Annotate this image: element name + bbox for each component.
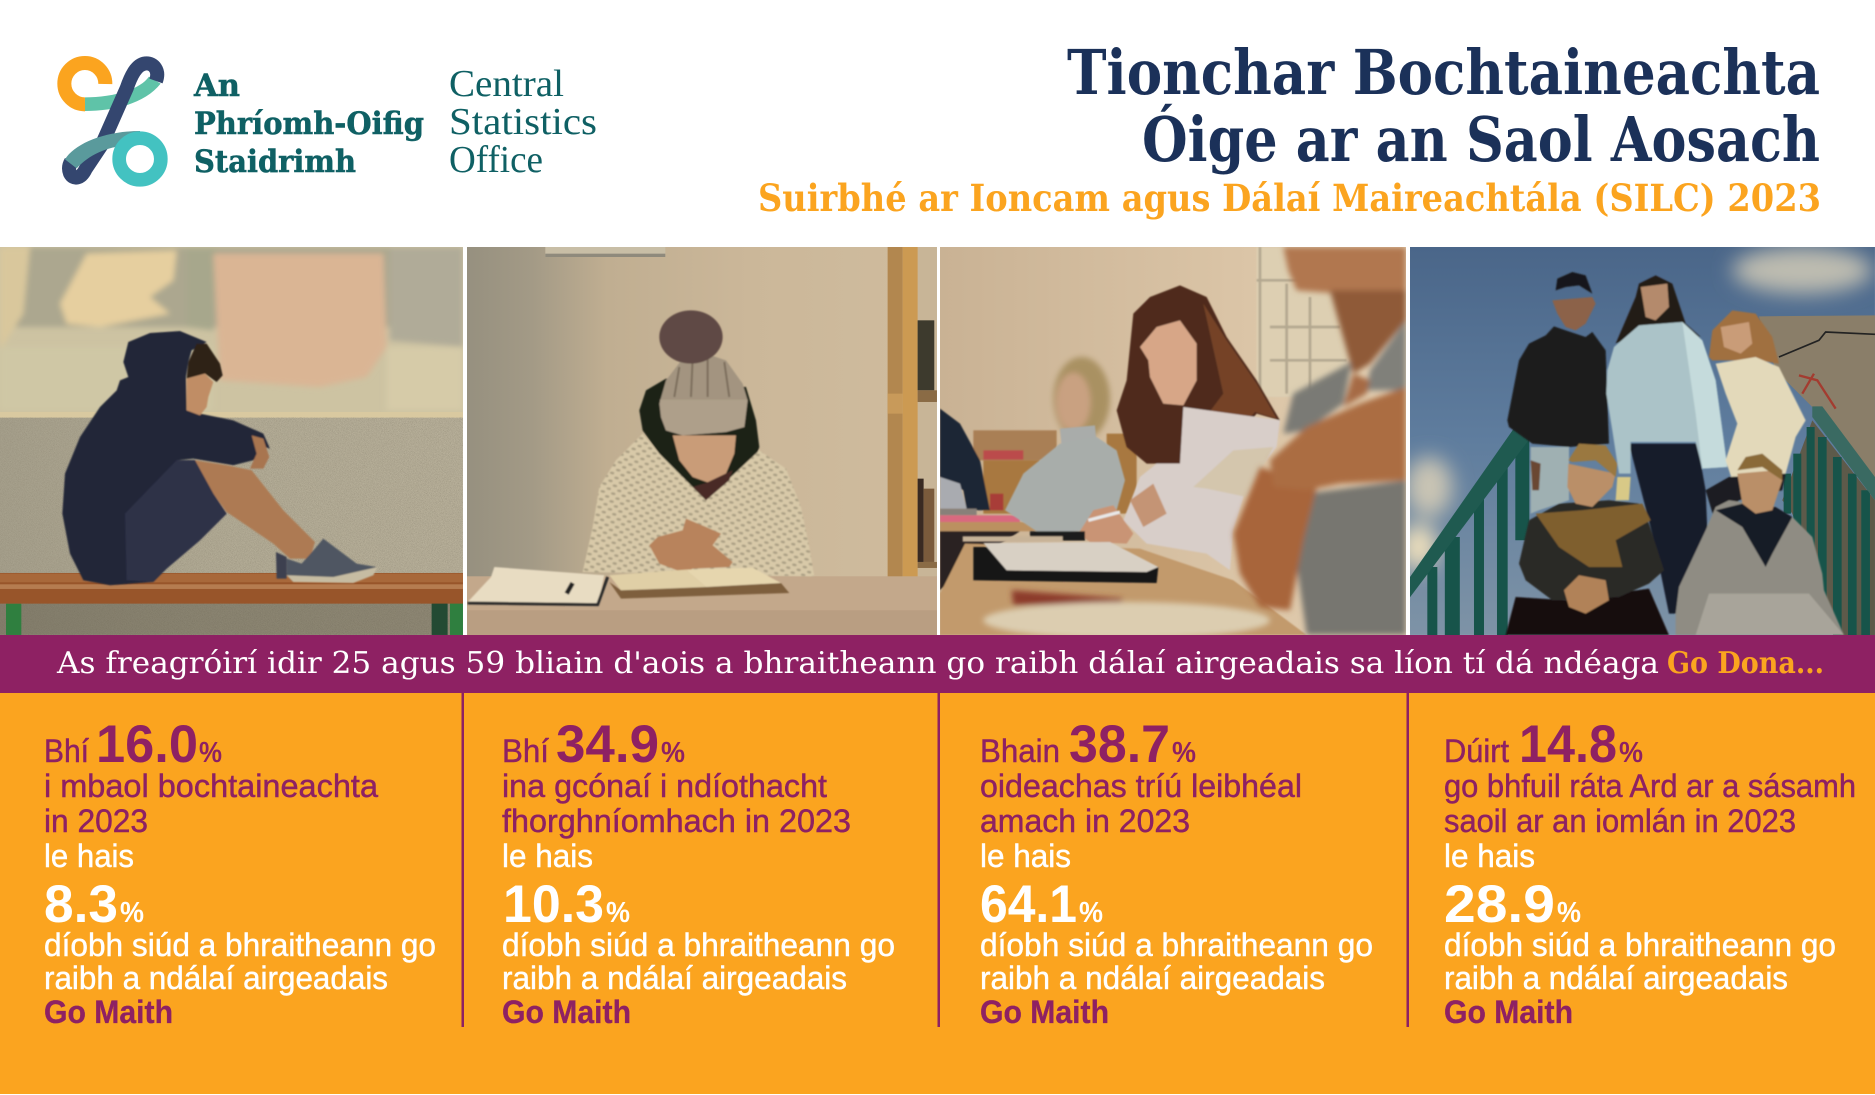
panel: life satisfaction: Dúirt: [1444, 733, 1509, 769]
panel: material deprivation: %: [606, 897, 630, 929]
panel: material deprivation: díobh siúd a bhraitheann go: [502, 927, 895, 963]
photo: boy sitting on a bench: [0, 247, 463, 635]
panel: material deprivation: Bhí: [502, 733, 549, 769]
logo text: Irish name: Staidrimh: [194, 144, 356, 180]
banner: survey respondents: As freagróirí idir 25 agus 59 bliain d'aois a bhraitheann go raibh dálaí airgeadais sa líon tí dá ndéaga: [56, 646, 1659, 681]
panel: poverty risk: Go Maith: [44, 994, 173, 1030]
icon: CSO knot mark: [64, 63, 161, 180]
panel: life satisfaction: díobh siúd a bhraitheann go: [1444, 927, 1836, 963]
panel: poverty risk: 16.0: [96, 715, 198, 774]
panel: material deprivation: raibh a ndálaí airgeadais: [502, 960, 847, 996]
title: [1067, 36, 1820, 176]
logo text: Irish name: An: [193, 68, 240, 104]
logo text: English name: Statistics: [449, 101, 597, 143]
logo: Central Statistics Office: [64, 63, 597, 181]
banner: survey respondents: Go Dona...: [1667, 646, 1824, 681]
panel: material deprivation: 34.9: [556, 715, 659, 774]
column dividers: [462, 692, 1409, 1027]
panel: life satisfaction: raibh a ndálaí airgeadais: [1444, 960, 1788, 996]
panel: material deprivation: Go Maith: [502, 994, 631, 1030]
panel: life satisfaction: %: [1557, 897, 1581, 929]
panel: third level education: Bhain: [980, 733, 1060, 769]
panel: third level education: %: [1172, 737, 1196, 769]
panel: third level education: %: [1079, 897, 1103, 929]
panel: third level education: oideachas tríú leibhéal: [980, 768, 1302, 804]
photo: girl in bobble hat and blanket reading: [466, 247, 937, 635]
panel: poverty risk: [44, 715, 436, 1030]
panel: poverty risk: 8.3: [44, 875, 118, 934]
panel: poverty risk: %: [120, 897, 144, 929]
panel: life satisfaction: 14.8: [1519, 715, 1617, 774]
panel: third level education: [980, 715, 1373, 1030]
panel: third level education: 38.7: [1069, 715, 1170, 774]
panel: material deprivation: [502, 715, 895, 1030]
panel: third level education: amach in 2023: [980, 803, 1190, 839]
panel: poverty risk: raibh a ndálaí airgeadais: [44, 960, 388, 996]
panel: third level education: díobh siúd a bhraitheann go: [980, 927, 1373, 963]
panel: poverty risk: Bhí: [44, 733, 89, 769]
logo text: English name: Office: [449, 139, 543, 181]
banner: survey respondents: [0, 635, 1875, 693]
panel: life satisfaction: %: [1619, 737, 1643, 769]
panel: life satisfaction: Go Maith: [1444, 994, 1573, 1030]
panel: life satisfaction: go bhfuil ráta Ard ar a sásamh: [1444, 768, 1856, 804]
panel: life satisfaction: saoil ar an iomlán in 2023: [1444, 803, 1796, 839]
panel: life satisfaction: [1444, 715, 1856, 1030]
panel: third level education: Go Maith: [980, 994, 1109, 1030]
panel: life satisfaction: 28.9: [1444, 875, 1555, 934]
panel: third level education: 64.1: [980, 875, 1077, 934]
logo text: Irish name: Phríomh-Oifig: [194, 106, 424, 142]
panel: poverty risk: %: [199, 737, 222, 769]
panel: material deprivation: %: [661, 737, 685, 769]
panel: orange statistics background: [0, 693, 1875, 1094]
panel: material deprivation: ina gcónaí i ndíothacht: [502, 768, 827, 804]
panel: poverty risk: i mbaol bochtaineachta: [44, 768, 378, 804]
panel: third level education: le hais: [980, 838, 1071, 874]
panel: poverty risk: le hais: [44, 838, 134, 874]
panel: life satisfaction: le hais: [1444, 838, 1535, 874]
panel: material deprivation: 10.3: [503, 875, 604, 934]
logo text: Irish name: [193, 68, 424, 180]
photo: students in a classroom: [940, 247, 1406, 639]
logo text: English name: Central: [449, 63, 564, 105]
photo: group of teenagers on steps: [1401, 247, 1875, 635]
panel: poverty risk: in 2023: [44, 803, 148, 839]
panel: material deprivation: le hais: [502, 838, 593, 874]
logo text: English name: [449, 63, 597, 181]
panel: material deprivation: fhorghníomhach in 2023: [502, 803, 851, 839]
panel: third level education: raibh a ndálaí airgeadais: [980, 960, 1325, 996]
panel: poverty risk: díobh siúd a bhraitheann go: [44, 927, 436, 963]
